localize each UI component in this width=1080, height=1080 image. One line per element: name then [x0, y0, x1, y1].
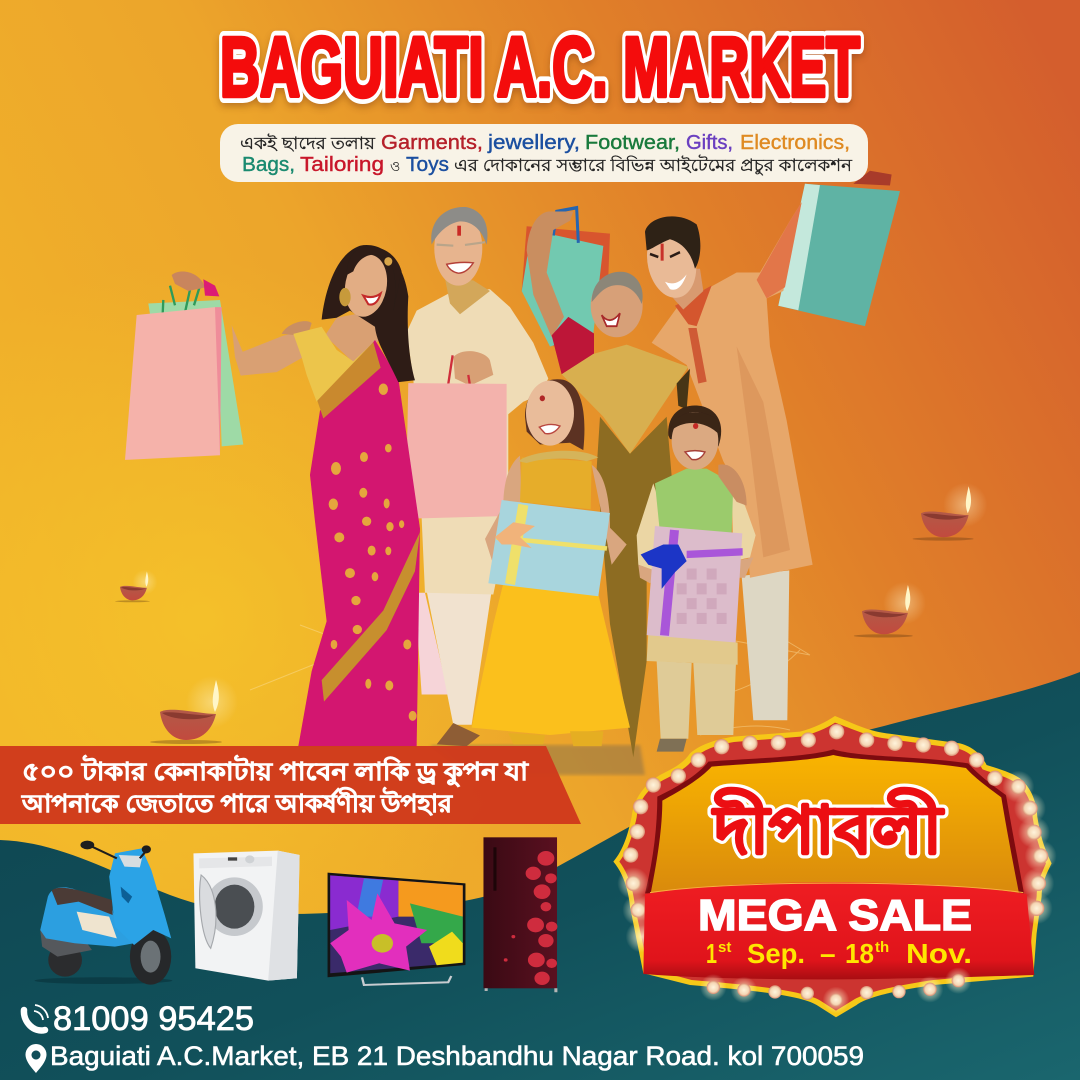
- arm: [232, 325, 303, 376]
- skirt: [472, 583, 630, 735]
- saree: [298, 340, 420, 746]
- dupatta: [518, 451, 598, 463]
- front shield: [109, 848, 171, 945]
- elderly woman with teal bag: [522, 208, 690, 757]
- top: [520, 458, 592, 509]
- boy with pink gift: [637, 405, 756, 752]
- icon: phone: [24, 1005, 48, 1030]
- tilak: [457, 226, 461, 236]
- sandal: [437, 723, 480, 746]
- arms: [485, 456, 627, 565]
- hair fringe: [670, 412, 720, 435]
- engine: [40, 930, 92, 957]
- icon: map pin: [26, 1044, 46, 1073]
- tagline pill: Gifts,: [686, 132, 733, 154]
- tagline pill: Footwear,: [585, 132, 680, 154]
- small pale bag behind: [415, 593, 448, 694]
- Diwali mega sale badge: [613, 716, 1057, 1017]
- saree gold sash: [317, 342, 381, 418]
- heading: Dipaboli: দীপাবলী: [712, 787, 944, 867]
- saree motifs: [329, 383, 417, 721]
- trousers: [427, 591, 492, 725]
- diya: right lower: [854, 582, 926, 638]
- diya: left large: [150, 676, 238, 744]
- neck and collar: [445, 279, 490, 314]
- hand with bangle: [172, 271, 219, 296]
- tilak: [693, 423, 698, 429]
- sale dates: Sep.: [747, 938, 805, 969]
- red lucky draw banner: আপনাকে জেতাতে পারে আকর্ষণীয় উপহার: [21, 787, 453, 818]
- product: refrigerator: [483, 837, 557, 992]
- tagline pill: jewellery,: [487, 132, 580, 154]
- man with teal bag: bag at right: [640, 171, 900, 720]
- smile: [363, 294, 381, 305]
- elderly man in cream kurta: [406, 207, 548, 746]
- hair: [668, 405, 721, 446]
- rear wheel: [48, 943, 82, 977]
- sale dates: th: [875, 939, 889, 956]
- kurta: [407, 289, 548, 594]
- tagline pill: ও: [390, 158, 400, 174]
- hand holding bag: [453, 351, 493, 386]
- stand: [362, 976, 451, 985]
- red lucky draw banner: ৫০০ টাকার কেনাকাটায় পাবেন লাকি ড্র কুপন যা: [22, 755, 530, 788]
- gift box: [641, 526, 743, 642]
- trousers: [657, 661, 736, 739]
- back bag: [522, 208, 610, 346]
- bag handles: [448, 355, 470, 386]
- hand on shoulder: [282, 321, 312, 335]
- vest: [655, 469, 733, 533]
- bulbs: [617, 724, 1057, 953]
- tagline pill: একই ছাদের তলায়: [240, 134, 376, 153]
- sale dates: Nov.: [906, 938, 972, 969]
- bindi: [540, 395, 545, 401]
- flower screen: [330, 875, 463, 973]
- contact: address: Baguiati A.C.Market, EB 21 Deshbandhu Nagar Road. kol 700059: [50, 1041, 864, 1071]
- shoes: [657, 739, 687, 752]
- kurta: [647, 633, 738, 665]
- product: blue scooter: [34, 841, 172, 985]
- teal wave footer: [0, 672, 1080, 1080]
- heading: mega sale: MEGA SALE: [698, 891, 972, 940]
- face: [672, 412, 718, 470]
- face: [526, 381, 574, 446]
- man figure: [640, 202, 813, 720]
- green bag: [148, 300, 243, 446]
- lower bulbs: [700, 967, 972, 1013]
- tagline pill: [220, 124, 868, 182]
- gift box: [488, 500, 610, 596]
- sale dates: –: [820, 938, 836, 969]
- saree gold border: [322, 532, 420, 702]
- pink bag: [125, 307, 222, 460]
- sale dates: 1: [706, 938, 717, 969]
- hair: [431, 207, 487, 245]
- rear panel: [40, 887, 134, 947]
- man's hand on shoulder: [718, 464, 747, 506]
- teal shopping bag: [778, 171, 900, 326]
- front wheel: [130, 929, 171, 985]
- earring: [339, 288, 351, 306]
- tagline pill: Tailoring: [300, 154, 384, 176]
- maang tikka: [384, 257, 392, 266]
- feet: [508, 731, 603, 746]
- glasses: [437, 242, 485, 246]
- diya: left small: [115, 570, 157, 602]
- headlight: [119, 855, 143, 867]
- seat: [52, 888, 113, 915]
- girl with blue gift: [472, 379, 630, 746]
- tagline pill: Electronics,: [740, 132, 850, 154]
- face: [434, 211, 482, 286]
- hair front: [347, 247, 402, 311]
- tagline pill: Bags,: [242, 154, 295, 176]
- figure: [527, 211, 690, 757]
- hair: [525, 379, 584, 450]
- face: [340, 250, 392, 321]
- bag handles: [163, 282, 200, 314]
- sale dates: st: [718, 939, 731, 956]
- contact: phone number: 81009 95425: [53, 1000, 254, 1038]
- tagline pill: Garments,: [381, 132, 483, 154]
- tagline pill: এর দোকানের সম্ভারে বিভিন্ন আইটেমের প্রচুর কালেকশন: [454, 155, 853, 175]
- ribbon: [643, 882, 1034, 1013]
- sale dates: [706, 938, 972, 969]
- tagline pill: Toys: [406, 154, 449, 176]
- diya: right upper: [912, 483, 987, 541]
- sale dates: 18: [845, 938, 874, 969]
- smile: [685, 451, 705, 460]
- pink bag: [406, 383, 507, 519]
- sleeves: [637, 483, 756, 572]
- marquee frame: [613, 716, 1057, 1017]
- red lucky draw banner: [0, 746, 581, 824]
- floor rangoli lines: [250, 625, 810, 740]
- hair: [322, 245, 415, 382]
- heading: Dipaboli: দীপাবলী: [712, 787, 944, 867]
- chest: [325, 311, 378, 362]
- floor shadow under family: [430, 745, 645, 775]
- blouse: [293, 327, 375, 402]
- floor: [77, 912, 117, 938]
- hands: [638, 557, 753, 583]
- mirrors: [80, 841, 151, 858]
- smile: [447, 262, 473, 273]
- product: television: [328, 873, 465, 985]
- product: washing machine: [193, 851, 300, 981]
- woman in magenta saree with bags: [125, 245, 420, 746]
- smile: [539, 424, 560, 434]
